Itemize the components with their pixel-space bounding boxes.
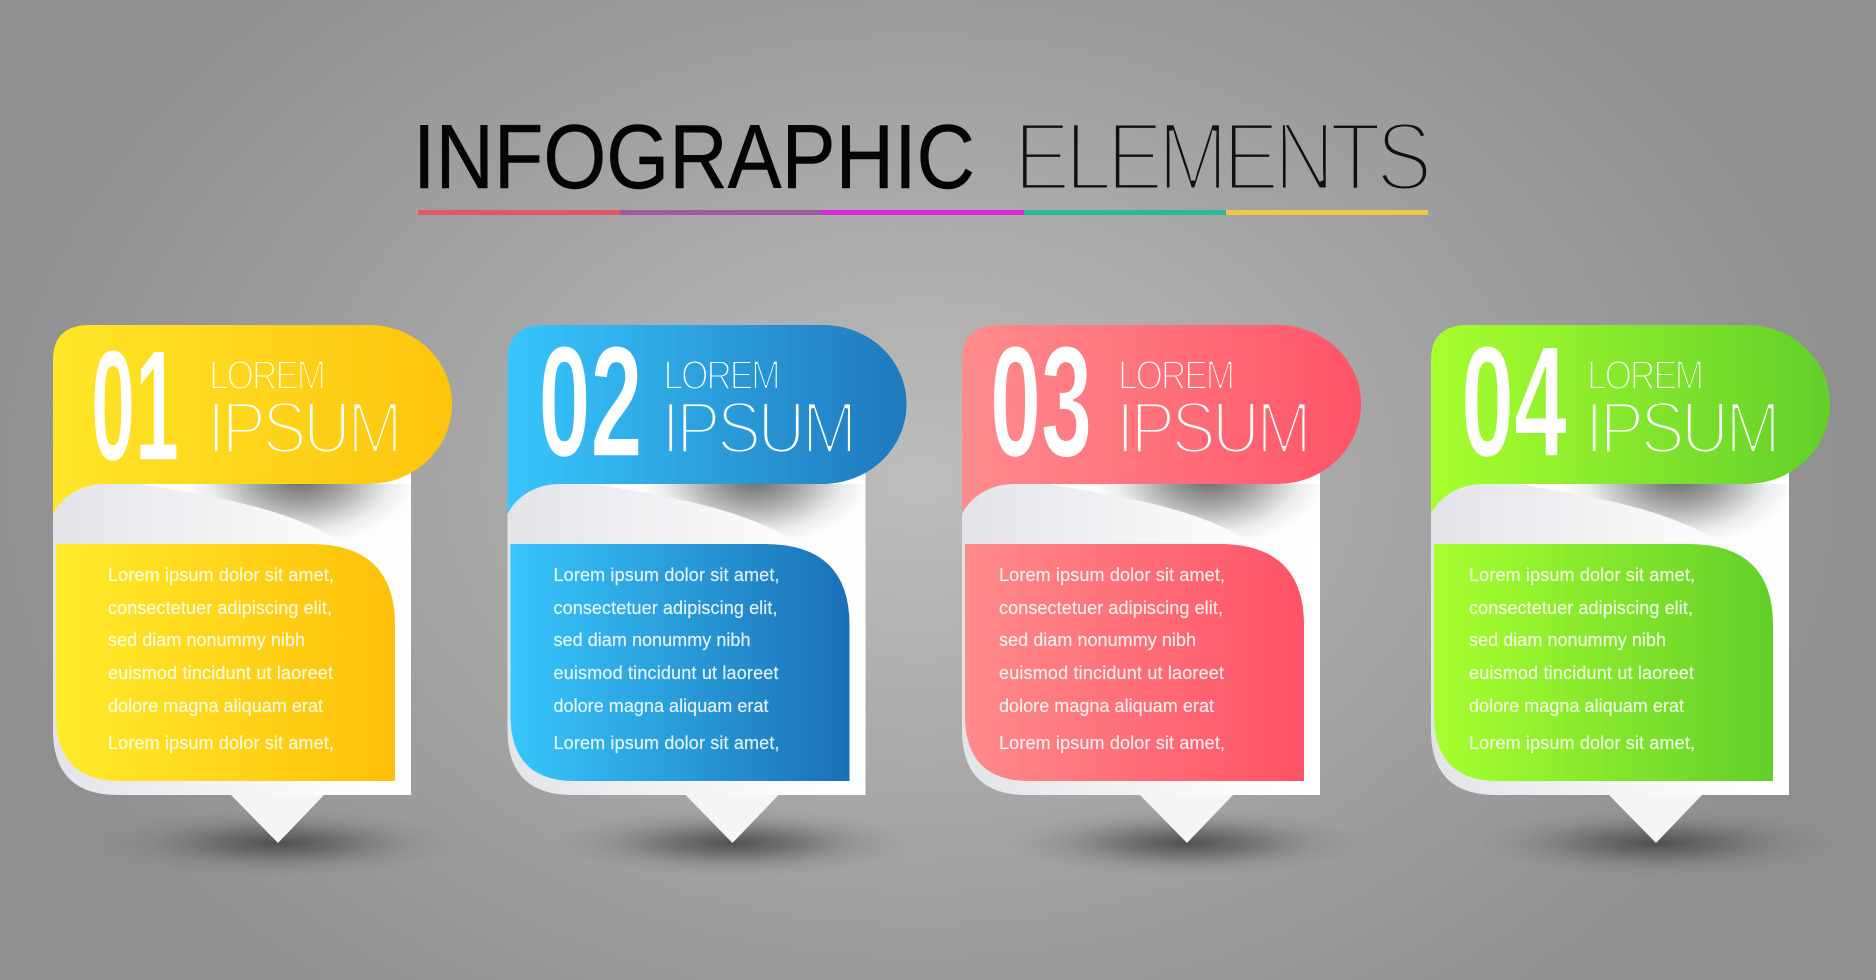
ground shadow — [1007, 809, 1367, 877]
title underline — [418, 210, 1428, 215]
card backing — [53, 470, 411, 795]
body text: Lorem ipsum dolor sit amet, — [1469, 733, 1695, 753]
body text: euismod tincidunt ut laoreet — [554, 663, 778, 683]
body text: euismod tincidunt ut laoreet — [1469, 663, 1694, 683]
heading: IPSUM — [662, 388, 854, 469]
body text: consectetuer adipiscing elit, — [108, 598, 332, 618]
body text: consectetuer adipiscing elit, — [1469, 598, 1693, 618]
body text: dolore magna aliquam erat — [999, 696, 1214, 716]
body text — [554, 565, 780, 753]
body text — [1469, 565, 1695, 753]
heading: LOREM — [1587, 352, 1702, 398]
body text: consectetuer adipiscing elit, — [999, 598, 1223, 618]
body text: Lorem ipsum dolor sit amet, — [1469, 565, 1695, 585]
body text — [108, 565, 334, 753]
header banner — [53, 325, 452, 514]
heading: IPSUM — [207, 388, 399, 469]
body panel — [1434, 544, 1773, 781]
heading: LOREM — [664, 352, 778, 398]
title: INFOGRAPHIC — [413, 107, 975, 208]
body text: Lorem ipsum dolor sit amet, — [999, 565, 1225, 585]
body panel — [965, 544, 1304, 781]
panel: card 01 yellow — [53, 318, 458, 877]
panel: card 02 blue — [508, 314, 912, 877]
body text: dolore magna aliquam erat — [1469, 696, 1684, 716]
body text: consectetuer adipiscing elit, — [554, 598, 778, 618]
number: 04 — [1461, 314, 1567, 490]
curl shadow — [1518, 484, 1789, 544]
body text: sed diam nonummy nibh — [1469, 630, 1666, 650]
curl shadow — [140, 484, 411, 544]
pointer — [1140, 795, 1233, 843]
card backing — [962, 470, 1320, 795]
ground shadow — [98, 809, 458, 877]
header banner — [508, 325, 906, 514]
card backing — [1431, 470, 1789, 795]
heading — [207, 352, 399, 469]
body text — [999, 565, 1225, 753]
heading: LOREM — [1118, 352, 1233, 398]
pointer — [231, 795, 324, 843]
heading — [1585, 352, 1777, 469]
number: 02 — [538, 314, 642, 490]
ground shadow — [552, 809, 912, 877]
panel: card 04 green — [1431, 314, 1836, 877]
pointer — [686, 795, 778, 843]
body text: Lorem ipsum dolor sit amet, — [554, 565, 780, 585]
body text: sed diam nonummy nibh — [999, 630, 1196, 650]
body text: dolore magna aliquam erat — [554, 696, 768, 716]
header banner — [962, 325, 1361, 514]
curl shadow — [594, 484, 866, 544]
heading: IPSUM — [1116, 388, 1308, 469]
body text: euismod tincidunt ut laoreet — [108, 663, 333, 683]
curl shadow — [1049, 484, 1320, 544]
number: 03 — [990, 314, 1092, 490]
body text: Lorem ipsum dolor sit amet, — [554, 733, 780, 753]
title: ELEMENTS — [1014, 102, 1429, 211]
ground shadow — [1476, 809, 1836, 877]
panel: card 03 red — [962, 314, 1367, 877]
body text: euismod tincidunt ut laoreet — [999, 663, 1224, 683]
body text: Lorem ipsum dolor sit amet, — [999, 733, 1225, 753]
header banner — [1431, 325, 1830, 514]
card backing — [508, 470, 866, 795]
body panel — [56, 544, 395, 781]
body panel — [510, 544, 850, 781]
heading: LOREM — [209, 352, 324, 398]
body text: dolore magna aliquam erat — [108, 696, 323, 716]
pointer — [1609, 795, 1702, 843]
heading — [1116, 352, 1308, 469]
number: 01 — [91, 318, 179, 494]
body text: Lorem ipsum dolor sit amet, — [108, 565, 334, 585]
title — [413, 102, 1429, 211]
heading: IPSUM — [1585, 388, 1777, 469]
heading — [662, 352, 854, 469]
body text: sed diam nonummy nibh — [554, 630, 750, 650]
body text: Lorem ipsum dolor sit amet, — [108, 733, 334, 753]
body text: sed diam nonummy nibh — [108, 630, 305, 650]
